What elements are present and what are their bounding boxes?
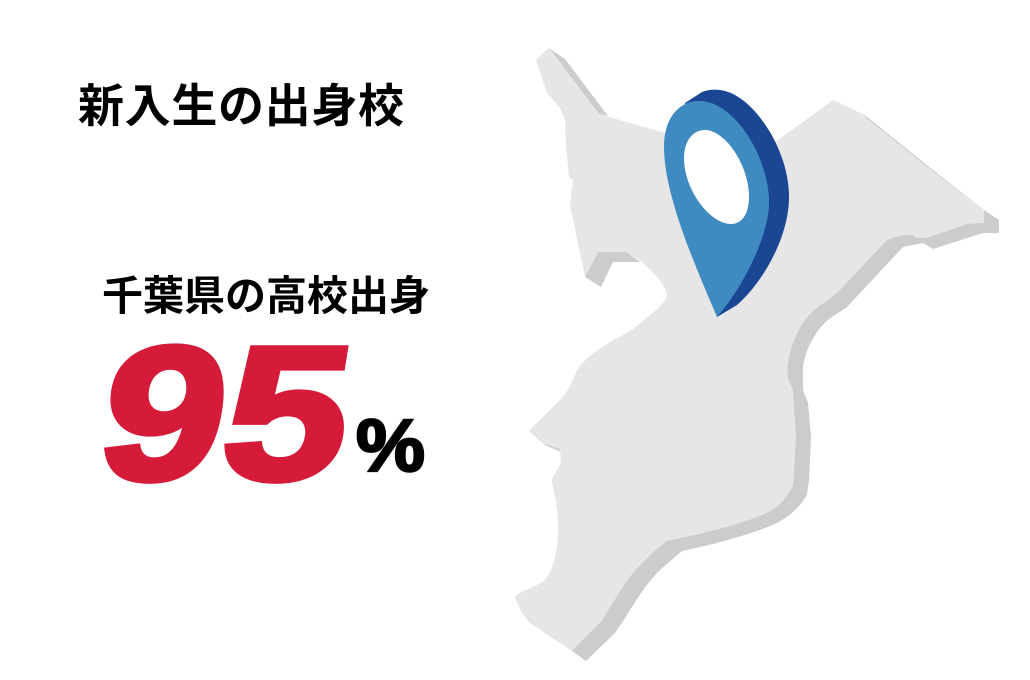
big number: 95: 95 xyxy=(87,307,366,520)
percent sign: % xyxy=(356,404,425,487)
title: 新入生の出身校 xyxy=(78,80,404,132)
map: Chiba prefecture xyxy=(515,48,999,661)
icon: location pin xyxy=(664,90,789,317)
map top face xyxy=(515,48,984,651)
pin back xyxy=(685,90,789,317)
map side extrusion xyxy=(529,48,999,661)
subheading: 千葉県の高校出身 xyxy=(102,273,430,319)
pin front xyxy=(664,101,769,317)
pin hole xyxy=(684,130,749,224)
